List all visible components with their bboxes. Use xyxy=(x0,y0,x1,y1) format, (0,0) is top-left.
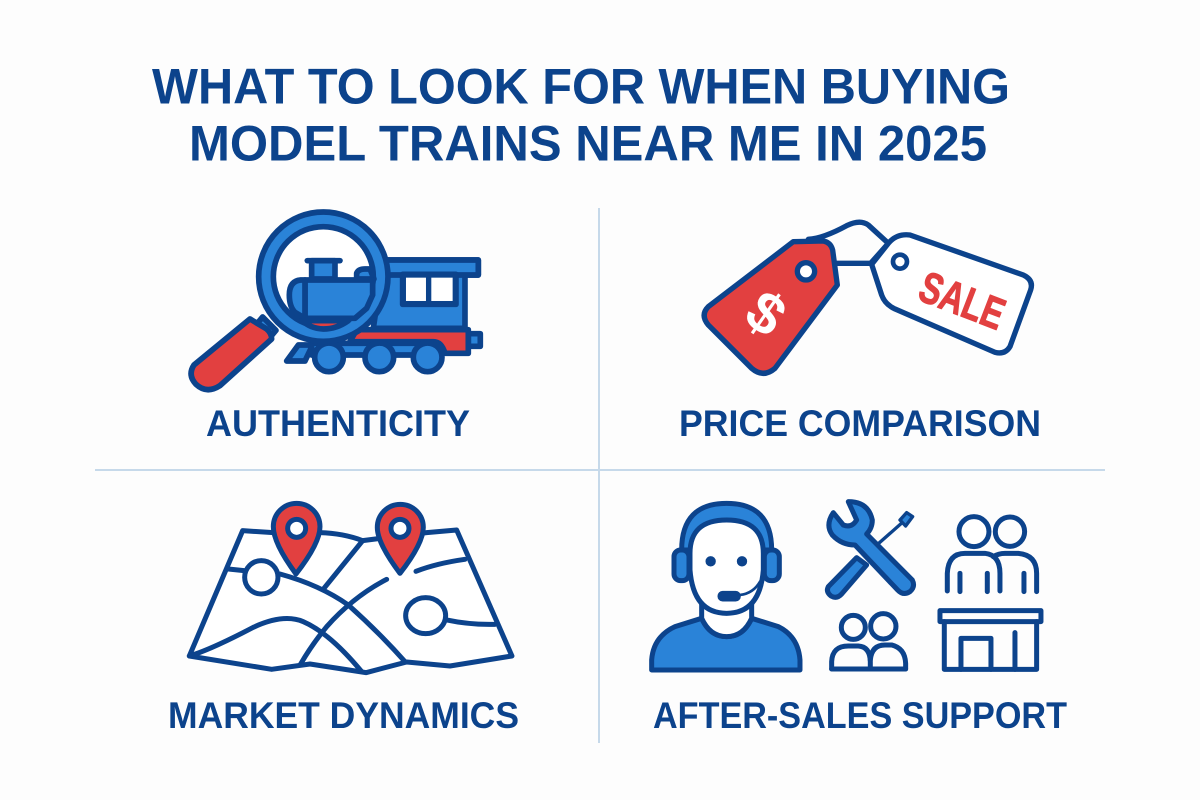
white sale tag xyxy=(872,235,1031,353)
panel: price comparison xyxy=(679,222,1041,444)
locomotive seen through lens xyxy=(289,261,374,329)
title: WHAT TO LOOK FOR WHEN BUYING xyxy=(152,58,1010,114)
map outline xyxy=(189,530,512,673)
red dollar tag: $ xyxy=(734,278,798,350)
icon: map with pins xyxy=(189,503,512,673)
wrench and screwdriver xyxy=(827,502,914,597)
label: authenticity: AUTHENTICITY xyxy=(206,403,470,444)
red dollar tag xyxy=(704,241,837,373)
icon: price tags xyxy=(704,222,1031,373)
map pin left xyxy=(273,503,320,574)
customers group bottom xyxy=(832,614,906,669)
label: after-sales support: AFTER-SALES SUPPORT xyxy=(653,695,1067,736)
shop xyxy=(940,611,1041,669)
panel: after-sales support xyxy=(652,502,1067,736)
title xyxy=(152,58,1010,172)
label: price comparison: PRICE COMPARISON xyxy=(679,403,1041,444)
panel: market dynamics xyxy=(168,503,519,736)
train carriage xyxy=(287,260,480,361)
icons: support xyxy=(652,502,1041,670)
customers group top xyxy=(947,517,1037,592)
magnifying glass handle xyxy=(191,317,276,390)
map circles xyxy=(245,561,446,634)
white sale tag: SALE xyxy=(912,263,1011,340)
panel: authenticity xyxy=(191,212,480,444)
map pin right xyxy=(377,504,423,573)
tag string xyxy=(808,222,888,263)
map roads xyxy=(189,541,495,672)
icon: train under magnifying glass xyxy=(191,212,480,390)
title: MODEL TRAINS NEAR ME IN 2025 xyxy=(189,116,987,172)
magnifying glass lens xyxy=(259,212,388,341)
label: market dynamics: MARKET DYNAMICS xyxy=(168,695,519,736)
support agent xyxy=(652,503,800,670)
train wheels xyxy=(315,343,442,372)
